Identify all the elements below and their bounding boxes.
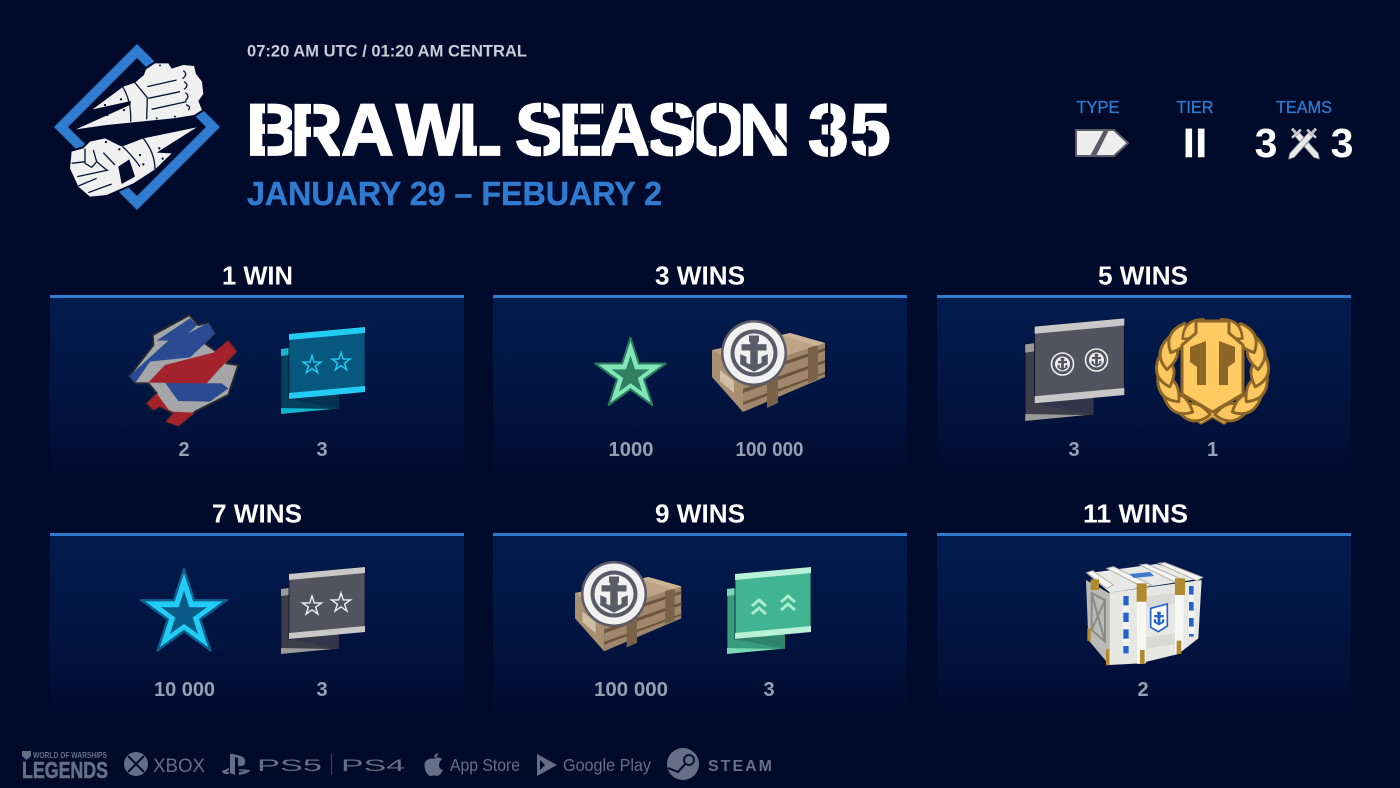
icon: type pennant — [1076, 130, 1128, 156]
teams — [1255, 97, 1353, 166]
panel: 1 win: 3 — [316, 439, 328, 461]
panel: 3 wins: 3 WINS — [655, 262, 745, 290]
panel: 11 wins: 11 WINS — [1083, 500, 1188, 528]
panel: 3 wins: 1000 — [608, 439, 654, 461]
title: BRAWL — [246, 90, 502, 171]
panel: 11 wins: 2 — [1137, 679, 1149, 701]
logo: World of Warships Legends: WORLD OF WARSHIPS — [33, 750, 107, 760]
icon: teal two-star flag — [281, 327, 365, 414]
upper gauntlet — [76, 63, 203, 129]
date range: JANUARY 29 – FEBUARY 2 — [247, 176, 662, 213]
icon: grey two-star flag — [281, 567, 365, 654]
panel: 5 wins: 1 — [1207, 439, 1218, 461]
panel: 7 wins: 7 WINS — [212, 500, 302, 528]
icon: white supply crate — [1086, 563, 1203, 665]
battle type — [1076, 97, 1128, 156]
icon: camouflage patch — [129, 315, 238, 426]
panel: 1 win: 2 — [178, 439, 190, 461]
teams: 3 — [1255, 120, 1277, 166]
logo: PlayStation 5 and 4: PS5 — [257, 756, 322, 775]
tier — [1176, 97, 1214, 166]
panel: 3 wins: 100 000 — [736, 439, 804, 461]
lower gauntlet — [70, 127, 197, 197]
logo: PlayStation 5 and 4 — [222, 754, 405, 775]
panel: 3 wins — [493, 262, 907, 490]
panel: 7 wins: 10 000 — [154, 679, 215, 701]
panel: 5 wins — [937, 262, 1351, 490]
panel: 9 wins: 100 000 — [594, 679, 668, 701]
title: 35 — [808, 90, 891, 171]
logo: World of Warships Legends — [22, 750, 108, 783]
panel: 9 wins — [493, 500, 907, 728]
panel: 9 wins: 9 WINS — [655, 500, 745, 528]
teams: TEAMS — [1276, 97, 1332, 117]
emblem: crossed gauntlets in diamond — [54, 44, 220, 210]
icon: blue star — [141, 569, 227, 650]
blue diamond frame — [54, 44, 220, 210]
panel: 9 wins: 3 — [763, 679, 775, 701]
icon: green chevron flag — [727, 567, 811, 654]
battle type: TYPE — [1076, 97, 1120, 117]
panel: 5 wins: 5 WINS — [1098, 262, 1188, 290]
logo: Google Play: Google Play — [563, 755, 651, 775]
logo: App Store: App Store — [450, 755, 520, 775]
panel: 5 wins: 3 — [1068, 439, 1080, 461]
title: SEASON — [515, 90, 791, 171]
logo: App Store — [424, 753, 520, 776]
logo: Xbox — [124, 752, 205, 777]
teams: 3 — [1331, 120, 1353, 166]
tier: II — [1183, 120, 1208, 166]
tier: TIER — [1176, 97, 1214, 117]
footer: platform logos — [22, 748, 772, 783]
logo: PlayStation 5 and 4: PS4 — [341, 756, 405, 775]
logo: Steam — [667, 748, 772, 780]
icon: wooden crate with credits coin — [575, 561, 681, 651]
icon: wooden crate with credits coin — [712, 320, 825, 412]
logo: Google Play — [537, 754, 651, 776]
icon: green star — [595, 338, 666, 405]
panel: 11 wins — [937, 500, 1351, 728]
icon: grey coin flag — [1025, 318, 1124, 421]
logo: Steam: STEAM — [708, 758, 772, 775]
panel: 7 wins — [50, 500, 464, 728]
icon: gold laurel medal — [1154, 316, 1271, 426]
logo: Xbox: XBOX — [153, 756, 205, 777]
icon: crossed swords — [1284, 125, 1324, 163]
logo: World of Warships Legends: LEGENDS — [22, 757, 108, 783]
start time: 07:20 AM UTC / 01:20 AM CENTRAL — [247, 42, 527, 60]
title — [246, 90, 891, 171]
panel: 7 wins: 3 — [316, 679, 328, 701]
panel: 1 win: 1 WIN — [222, 262, 293, 290]
panel: 1 win — [50, 262, 464, 490]
